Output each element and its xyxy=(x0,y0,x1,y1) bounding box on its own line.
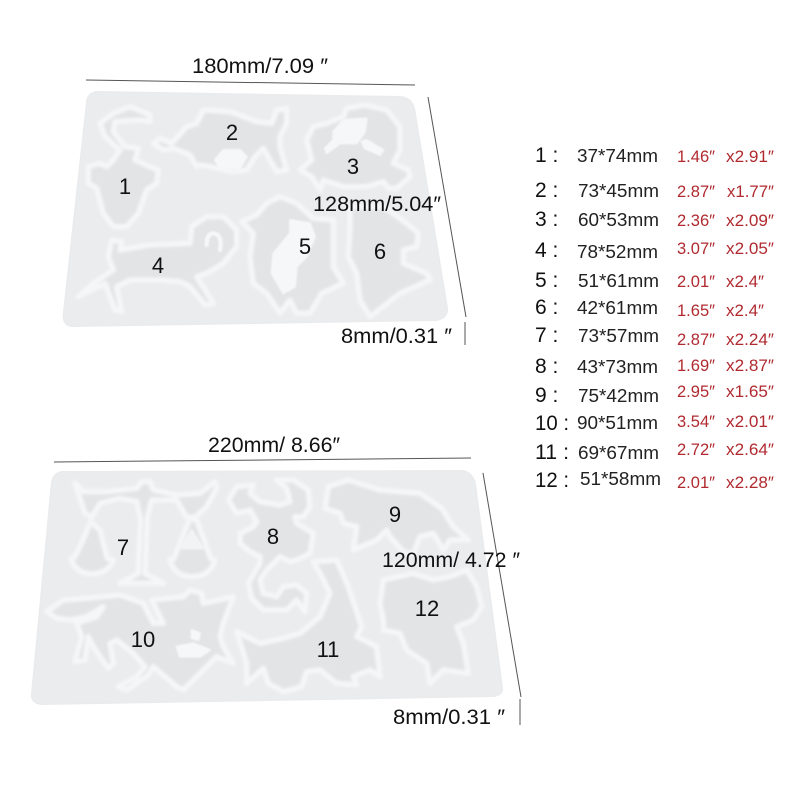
row 9 xyxy=(535,383,774,407)
row 6: 6 : xyxy=(535,296,558,319)
cavity 6 xyxy=(348,207,430,317)
row 6: 1.65″ xyxy=(677,302,715,320)
row 12: 51*58mm xyxy=(580,468,661,489)
row 2 xyxy=(535,179,774,202)
row 6: x2.4″ xyxy=(726,302,764,320)
row 8 xyxy=(535,355,774,378)
hole mark in cavity 11 xyxy=(283,665,296,669)
row 2: 73*45mm xyxy=(578,180,659,201)
row 5 xyxy=(535,269,764,292)
row 8: 8 : xyxy=(535,355,558,378)
row 1: x2.91″ xyxy=(726,148,774,166)
cavity numbers two: 7 xyxy=(117,535,129,560)
cavity 1 xyxy=(88,107,158,227)
depth label: 8mm/0.31 ″ xyxy=(341,325,453,348)
row 2: x1.77″ xyxy=(727,183,774,201)
panel: mold two xyxy=(32,471,502,704)
right pan island xyxy=(180,530,203,548)
cavity numbers one xyxy=(119,120,386,278)
row 5: 51*61mm xyxy=(578,270,659,291)
height label: 128mm/5.04″ xyxy=(313,193,442,216)
row 3: x2.09″ xyxy=(726,212,774,230)
cavity 10 xyxy=(47,590,233,690)
cavities two xyxy=(47,480,482,692)
cavities one xyxy=(78,105,430,317)
mold body two xyxy=(32,471,502,704)
mold body one xyxy=(64,92,447,326)
cavity numbers two: 11 xyxy=(317,637,339,662)
cavity numbers one: 2 xyxy=(226,120,238,145)
row 3: 3 : xyxy=(535,208,558,231)
row 11: 69*67mm xyxy=(578,442,659,463)
dimension line top xyxy=(86,80,415,85)
row 12: 12 : xyxy=(535,469,569,492)
row 4: x2.05″ xyxy=(726,240,774,258)
panel: mold one xyxy=(64,92,447,326)
cavity 3 xyxy=(300,105,410,190)
dimension line right two xyxy=(483,473,521,697)
cavity numbers two: 12 xyxy=(415,596,439,621)
row 3 xyxy=(535,208,774,231)
width label two: 220mm/ 8.66″ xyxy=(208,434,341,457)
cavity 11 xyxy=(237,560,380,692)
row 11: 2.72″ xyxy=(677,441,715,459)
depth line two xyxy=(519,699,521,725)
row 5: 5 : xyxy=(535,269,558,292)
cavity numbers one: 3 xyxy=(347,154,359,179)
row 3: 2.36″ xyxy=(677,212,715,230)
row 7: 73*57mm xyxy=(578,325,659,346)
cavity numbers two xyxy=(117,502,439,662)
row 6 xyxy=(535,296,764,320)
cavity numbers one: 6 xyxy=(374,239,386,264)
row 10: 90*51mm xyxy=(577,412,658,433)
row 1: 37*74mm xyxy=(577,145,658,166)
row 6: 42*61mm xyxy=(577,297,658,318)
row 10: 3.54″ xyxy=(677,413,715,431)
cavity 12 xyxy=(380,570,482,683)
row 12: 2.01″ xyxy=(677,474,715,492)
island in cavity 2 xyxy=(215,150,247,168)
row 11: x2.64″ xyxy=(726,441,774,459)
row 4: 4 : xyxy=(535,239,558,262)
row 9: 2.95″ xyxy=(677,383,715,401)
island in cavity 5 xyxy=(272,220,315,293)
cavity 8 xyxy=(228,480,313,612)
dimension line right xyxy=(428,97,466,317)
island in cavity 3 xyxy=(325,118,383,155)
row 8: x2.87″ xyxy=(726,357,774,375)
row 9: 75*42mm xyxy=(578,385,659,406)
row 11 xyxy=(535,441,774,464)
row 10: x2.01″ xyxy=(726,413,774,431)
row 5: 2.01″ xyxy=(677,273,715,291)
row 2: 2 : xyxy=(535,179,558,202)
cavity 2 xyxy=(153,108,287,172)
row 8: 1.69″ xyxy=(677,357,715,375)
depth line xyxy=(464,322,466,345)
row 12: x2.28″ xyxy=(726,474,774,492)
row 10: 10 : xyxy=(535,412,569,435)
dimension height two xyxy=(382,473,521,697)
left pan xyxy=(71,522,113,574)
cavity numbers one: 5 xyxy=(299,234,311,259)
row 4: 3.07″ xyxy=(677,240,715,258)
row 7 xyxy=(535,324,774,349)
row 7: 7 : xyxy=(535,324,558,347)
cavity 9 xyxy=(325,480,468,553)
row 4: 78*52mm xyxy=(577,241,658,262)
dimension depth two xyxy=(393,699,520,729)
dimension depth one xyxy=(341,322,465,348)
row 1: 1 : xyxy=(535,144,558,167)
cavity 7: scale xyxy=(71,482,217,583)
row 9: x1.65″ xyxy=(726,383,774,401)
row 3: 60*53mm xyxy=(578,209,659,230)
cavity numbers two: 8 xyxy=(267,524,279,549)
cavity numbers two: 10 xyxy=(131,627,155,652)
row 7: 2.87″ xyxy=(677,331,715,349)
right pan xyxy=(170,518,215,577)
row 1 xyxy=(535,144,774,167)
row 5: x2.4″ xyxy=(726,273,764,291)
row 7: x2.24″ xyxy=(726,331,774,349)
width label: 180mm/7.09 ″ xyxy=(192,55,329,78)
row 9: 9 : xyxy=(535,384,558,407)
height label two: 120mm/ 4.72 ″ xyxy=(382,549,521,572)
island in cavity 10 xyxy=(177,630,210,657)
dimension width one xyxy=(86,55,415,85)
row 1: 1.46″ xyxy=(677,148,715,166)
row 12 xyxy=(535,468,774,492)
row 8: 43*73mm xyxy=(577,356,658,377)
horn in cavity 4 xyxy=(207,233,221,250)
dimension width two xyxy=(54,434,471,462)
row 2: 2.87″ xyxy=(677,183,715,201)
dimension line top two xyxy=(54,458,471,462)
cavity numbers one: 1 xyxy=(119,174,131,199)
row 10 xyxy=(535,412,774,435)
row 4 xyxy=(535,239,774,262)
cavity 5 xyxy=(242,197,343,313)
cavity numbers two: 9 xyxy=(389,502,401,527)
cavity 4 xyxy=(78,217,237,312)
dimension height one xyxy=(313,97,466,317)
beam xyxy=(75,482,217,583)
row 11: 11 : xyxy=(535,441,569,464)
depth label two: 8mm/0.31 ″ xyxy=(393,706,506,729)
cavity numbers one: 4 xyxy=(152,253,164,278)
size table xyxy=(535,144,774,492)
